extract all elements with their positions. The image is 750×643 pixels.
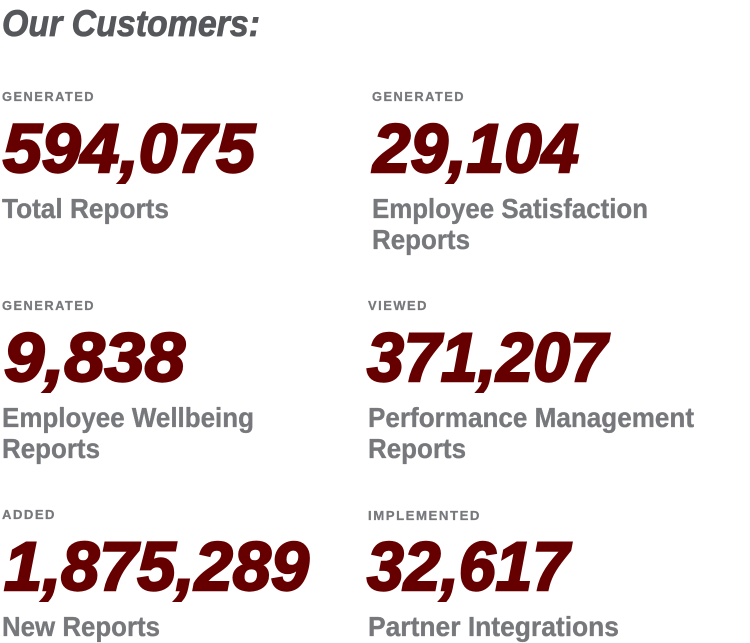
caption: total reports: Total Reports (2, 193, 169, 224)
number: 29,104: 29,104 (371, 110, 579, 187)
panel: employee wellbeing reports (2, 298, 254, 464)
label: generated: GENERATED (2, 298, 95, 313)
label: generated: GENERATED (2, 89, 95, 104)
number: 32,617: 32,617 (367, 528, 572, 605)
number: 594,075: 594,075 (3, 110, 257, 187)
caption: performance management reports: Reports (368, 433, 466, 464)
panel: performance management reports (367, 298, 694, 464)
caption: employee wellbeing reports: Reports (2, 433, 100, 464)
caption: employee satisfaction reports: Employee Satisfaction (372, 193, 648, 224)
number: 9,838: 9,838 (4, 319, 186, 396)
caption: partner integrations: Partner Integrations (368, 611, 619, 642)
caption: new reports: New Reports (2, 611, 160, 642)
label: generated: GENERATED (372, 89, 465, 104)
panel: new reports (2, 507, 310, 642)
label: added: ADDED (2, 507, 56, 522)
label: viewed: VIEWED (368, 298, 428, 313)
panel: partner integrations (367, 508, 619, 642)
number: 1,875,289: 1,875,289 (4, 528, 310, 605)
caption: performance management reports: Performance Management (368, 402, 694, 433)
panel: total reports (2, 89, 257, 224)
caption: employee satisfaction reports: Reports (372, 224, 470, 255)
caption: employee wellbeing reports: Employee Wellbeing (2, 402, 254, 433)
panel: employee satisfaction reports (371, 89, 648, 255)
label: implemented: IMPLEMENTED (368, 508, 481, 523)
title: Our Customers: (2, 3, 260, 44)
number: 371,207: 371,207 (367, 319, 610, 396)
